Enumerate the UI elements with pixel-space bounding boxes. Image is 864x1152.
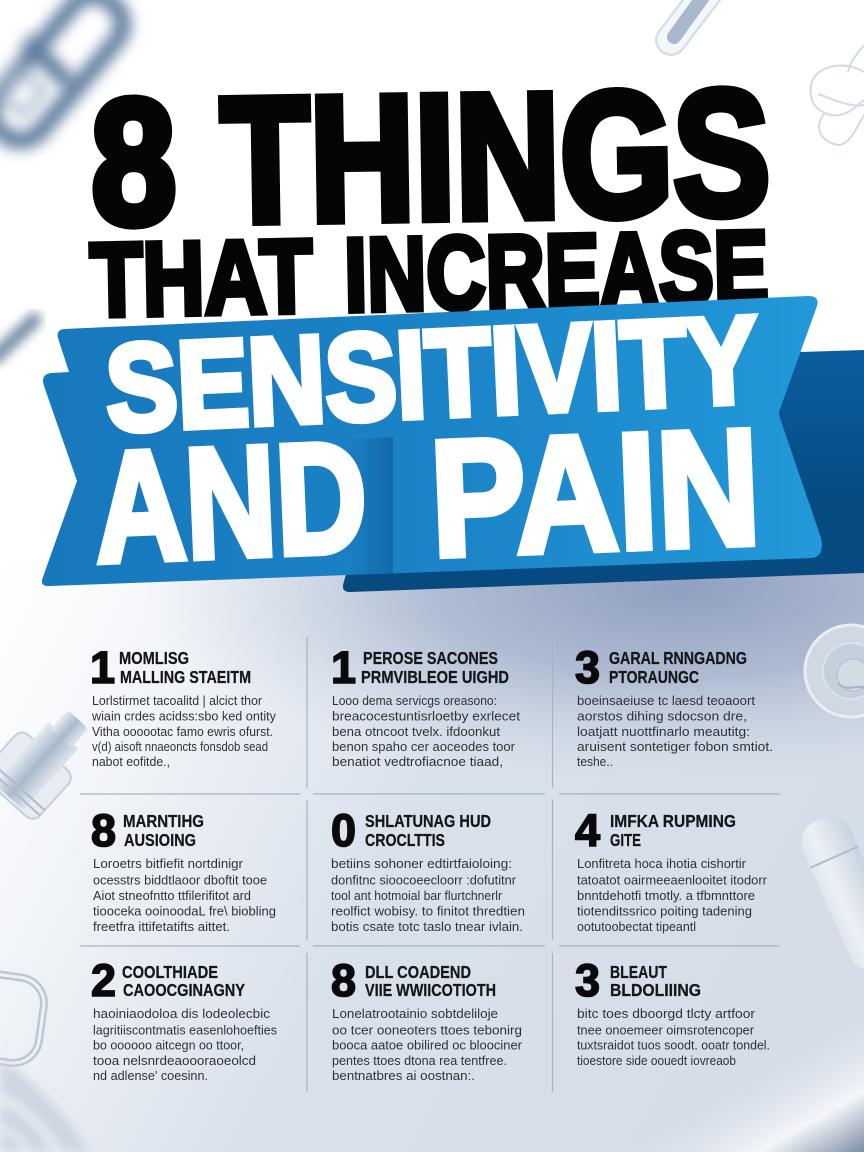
item 5: betiins sohoner edtirtfaioloing: xyxy=(331,857,512,871)
item 2: PRMVIBLEOE UIGHD xyxy=(361,667,509,687)
item 7: nd adlense' coesinn. xyxy=(93,1069,208,1083)
item 5: botis csate totc taslo tnear ivlain. xyxy=(331,920,523,934)
item 9: tioestore side oouedt iovreaob xyxy=(577,1054,736,1068)
item 6 xyxy=(575,805,767,934)
item 3: GARAL RNNGADNG xyxy=(609,648,747,668)
icon: outline shapes right xyxy=(811,45,864,145)
item 6: bnntdehotfi tmotly. a tfbmnttore xyxy=(577,889,755,903)
item 1 xyxy=(90,642,277,769)
item 1: MOMLISG xyxy=(119,648,189,668)
item 8 xyxy=(331,955,522,1083)
icon: glass dish right xyxy=(805,625,864,717)
item 9: bitc toes dboorgd tlcty artfoor xyxy=(577,1007,755,1021)
item 5: tool ant hotmoial bar flurtchnerlr xyxy=(331,889,502,903)
item 4: tiooceka ooinoodaL fre\ biobling xyxy=(93,904,276,918)
item 6: Lonfitreta hoca ihotia cishortir xyxy=(577,857,746,871)
banner text: AND: AND xyxy=(91,410,370,596)
pain panel shadow xyxy=(345,437,393,575)
item 8: bentnatbres ai oostnan:. xyxy=(332,1069,475,1083)
item 4: MARNTIHG xyxy=(123,811,204,831)
item 3: 3 xyxy=(575,642,600,693)
item 9: BLDOLIIING xyxy=(610,980,701,1000)
item 4: AUSIOING xyxy=(124,830,196,850)
item 2: breacocestuntisrloetby exrlecet xyxy=(332,710,521,724)
item 2: benon spaho cer aoceodes toor xyxy=(332,740,515,754)
item 9: 3 xyxy=(575,955,600,1006)
item 2: PEROSE SACONES xyxy=(363,648,498,668)
banner text: PAIN: PAIN xyxy=(427,394,763,591)
item 1: nabot eofitde., xyxy=(92,755,170,769)
item 8: VIIE WWIICOTIOTH xyxy=(365,980,496,1000)
item 9: BLEAUT xyxy=(610,962,667,982)
item 7: 2 xyxy=(91,955,116,1006)
item 5: 0 xyxy=(331,805,356,856)
item 6: IMFKA RUPMING xyxy=(610,811,736,831)
item 8: Lonelatrootainio sobtdeliloje xyxy=(332,1007,498,1021)
item 7: bo oooooo aitcegn oo ttoor, xyxy=(93,1038,244,1052)
item 6: tatoatot oairmeeaenlooitet itodorr xyxy=(577,874,767,888)
icon: blurred stripe left xyxy=(0,320,34,358)
item 8: oo tcer ooneoters ttoes tebonirg xyxy=(332,1024,522,1038)
title line: THAT INCREASE: THAT xyxy=(89,219,313,339)
item 9: tuxtsraidot tuos soodt. ooatr tondel. xyxy=(577,1038,770,1052)
item 3: aorstos dihing sdocson dre, xyxy=(577,710,747,724)
item 1: Vitha oooootac famo ewris ofurst. xyxy=(92,725,273,739)
item 3: teshe.. xyxy=(577,755,613,769)
item 4: 8 xyxy=(91,805,116,856)
item 7: CAOOCGINAGNY xyxy=(123,980,245,1000)
item 9: tnee onoemeer oimsrotencoper xyxy=(577,1024,754,1038)
item 5 xyxy=(331,805,525,934)
item 7: tooa nelsnrdeaoooraoeolcd xyxy=(93,1054,256,1068)
title line: 8 THINGS: 8 xyxy=(89,62,178,262)
icon: vial left xyxy=(0,695,105,823)
item 4: freetfra ittifetatifts aittet. xyxy=(93,920,230,934)
item 2: 1 xyxy=(331,642,356,693)
item 1: wiain crdes acidss:sbo ked ontity xyxy=(91,710,277,724)
item 7: haoiniaodoloa dis lodeolecbic xyxy=(93,1007,270,1021)
item 9 xyxy=(575,955,770,1068)
dark ribbon back xyxy=(343,350,864,592)
item 5: donfitnc sioocoeecloorr :dofutitnr xyxy=(331,874,516,888)
item 3: PTORAUNGC xyxy=(609,667,699,687)
item 6: tiotenditssrico poiting tadening xyxy=(577,904,752,918)
item 3 xyxy=(575,642,773,769)
item 8: pentes ttoes dtona rea tentfree. xyxy=(332,1054,507,1068)
icon: blurred folds bottom left xyxy=(0,1060,90,1152)
item 5: reolfict wobisy. to finitot thredtien xyxy=(331,904,525,918)
item 5: SHLATUNAG HUD xyxy=(365,811,491,831)
item 4: Aiot stneofntto ttfilerifitot ard xyxy=(93,889,251,903)
banner text: SENSITIVITY: SENSITIVITY xyxy=(103,292,761,458)
item 7: lagritiiscontmatis easenlohoefties xyxy=(93,1024,277,1038)
item 1: MALLING STAEITM xyxy=(120,667,251,687)
item 3: aruisent sontetiger fobon smtiot. xyxy=(577,740,773,754)
item 8: 8 xyxy=(331,955,356,1006)
item 6: ootutoobectat tipeantl xyxy=(577,920,696,934)
item 2 xyxy=(331,642,521,769)
item 3: boeinsaeiuse tc laesd teoaoort xyxy=(577,694,756,708)
item 8: DLL COADEND xyxy=(365,962,471,982)
item 4 xyxy=(91,805,276,934)
item 2: benatiot vedtrofiacnoe tiaad, xyxy=(332,755,503,769)
item 5: CROCLTTIS xyxy=(365,830,445,850)
icon: capsule right xyxy=(794,810,864,977)
item 7 xyxy=(91,955,277,1083)
item 7: COOLTHIADE xyxy=(122,962,218,982)
item 4: ocesstrs biddtlaoor dboftit tooe xyxy=(93,874,267,888)
item 1: v(d) aisoft nnaeoncts fonsdob sead xyxy=(92,740,268,754)
item 1: 1 xyxy=(90,642,115,693)
item 8: booca aatoe obilired oc bloociner xyxy=(332,1038,522,1052)
item 3: loatjatt nuottfinarlo meautitg: xyxy=(577,725,750,739)
item 2: bena otncoot tvelx. ifdoonkut xyxy=(332,725,501,739)
item 4: Loroetrs bitfiefit nortdinigr xyxy=(93,857,243,871)
item 1: Lorlstirmet tacoalitd | alcict thor xyxy=(92,694,262,708)
grid dividers xyxy=(80,637,780,1092)
icon: test tube top right xyxy=(671,0,712,40)
item 6: 4 xyxy=(575,805,600,856)
banner ribbon xyxy=(42,296,822,586)
item 6: GITE xyxy=(610,830,641,850)
icon: blurred capsule top left xyxy=(0,0,133,151)
icon: glass ring left xyxy=(0,970,47,1066)
title line: THAT INCREASE xyxy=(89,210,769,339)
item 2: Looo dema servicgs oreasono: xyxy=(332,694,497,708)
